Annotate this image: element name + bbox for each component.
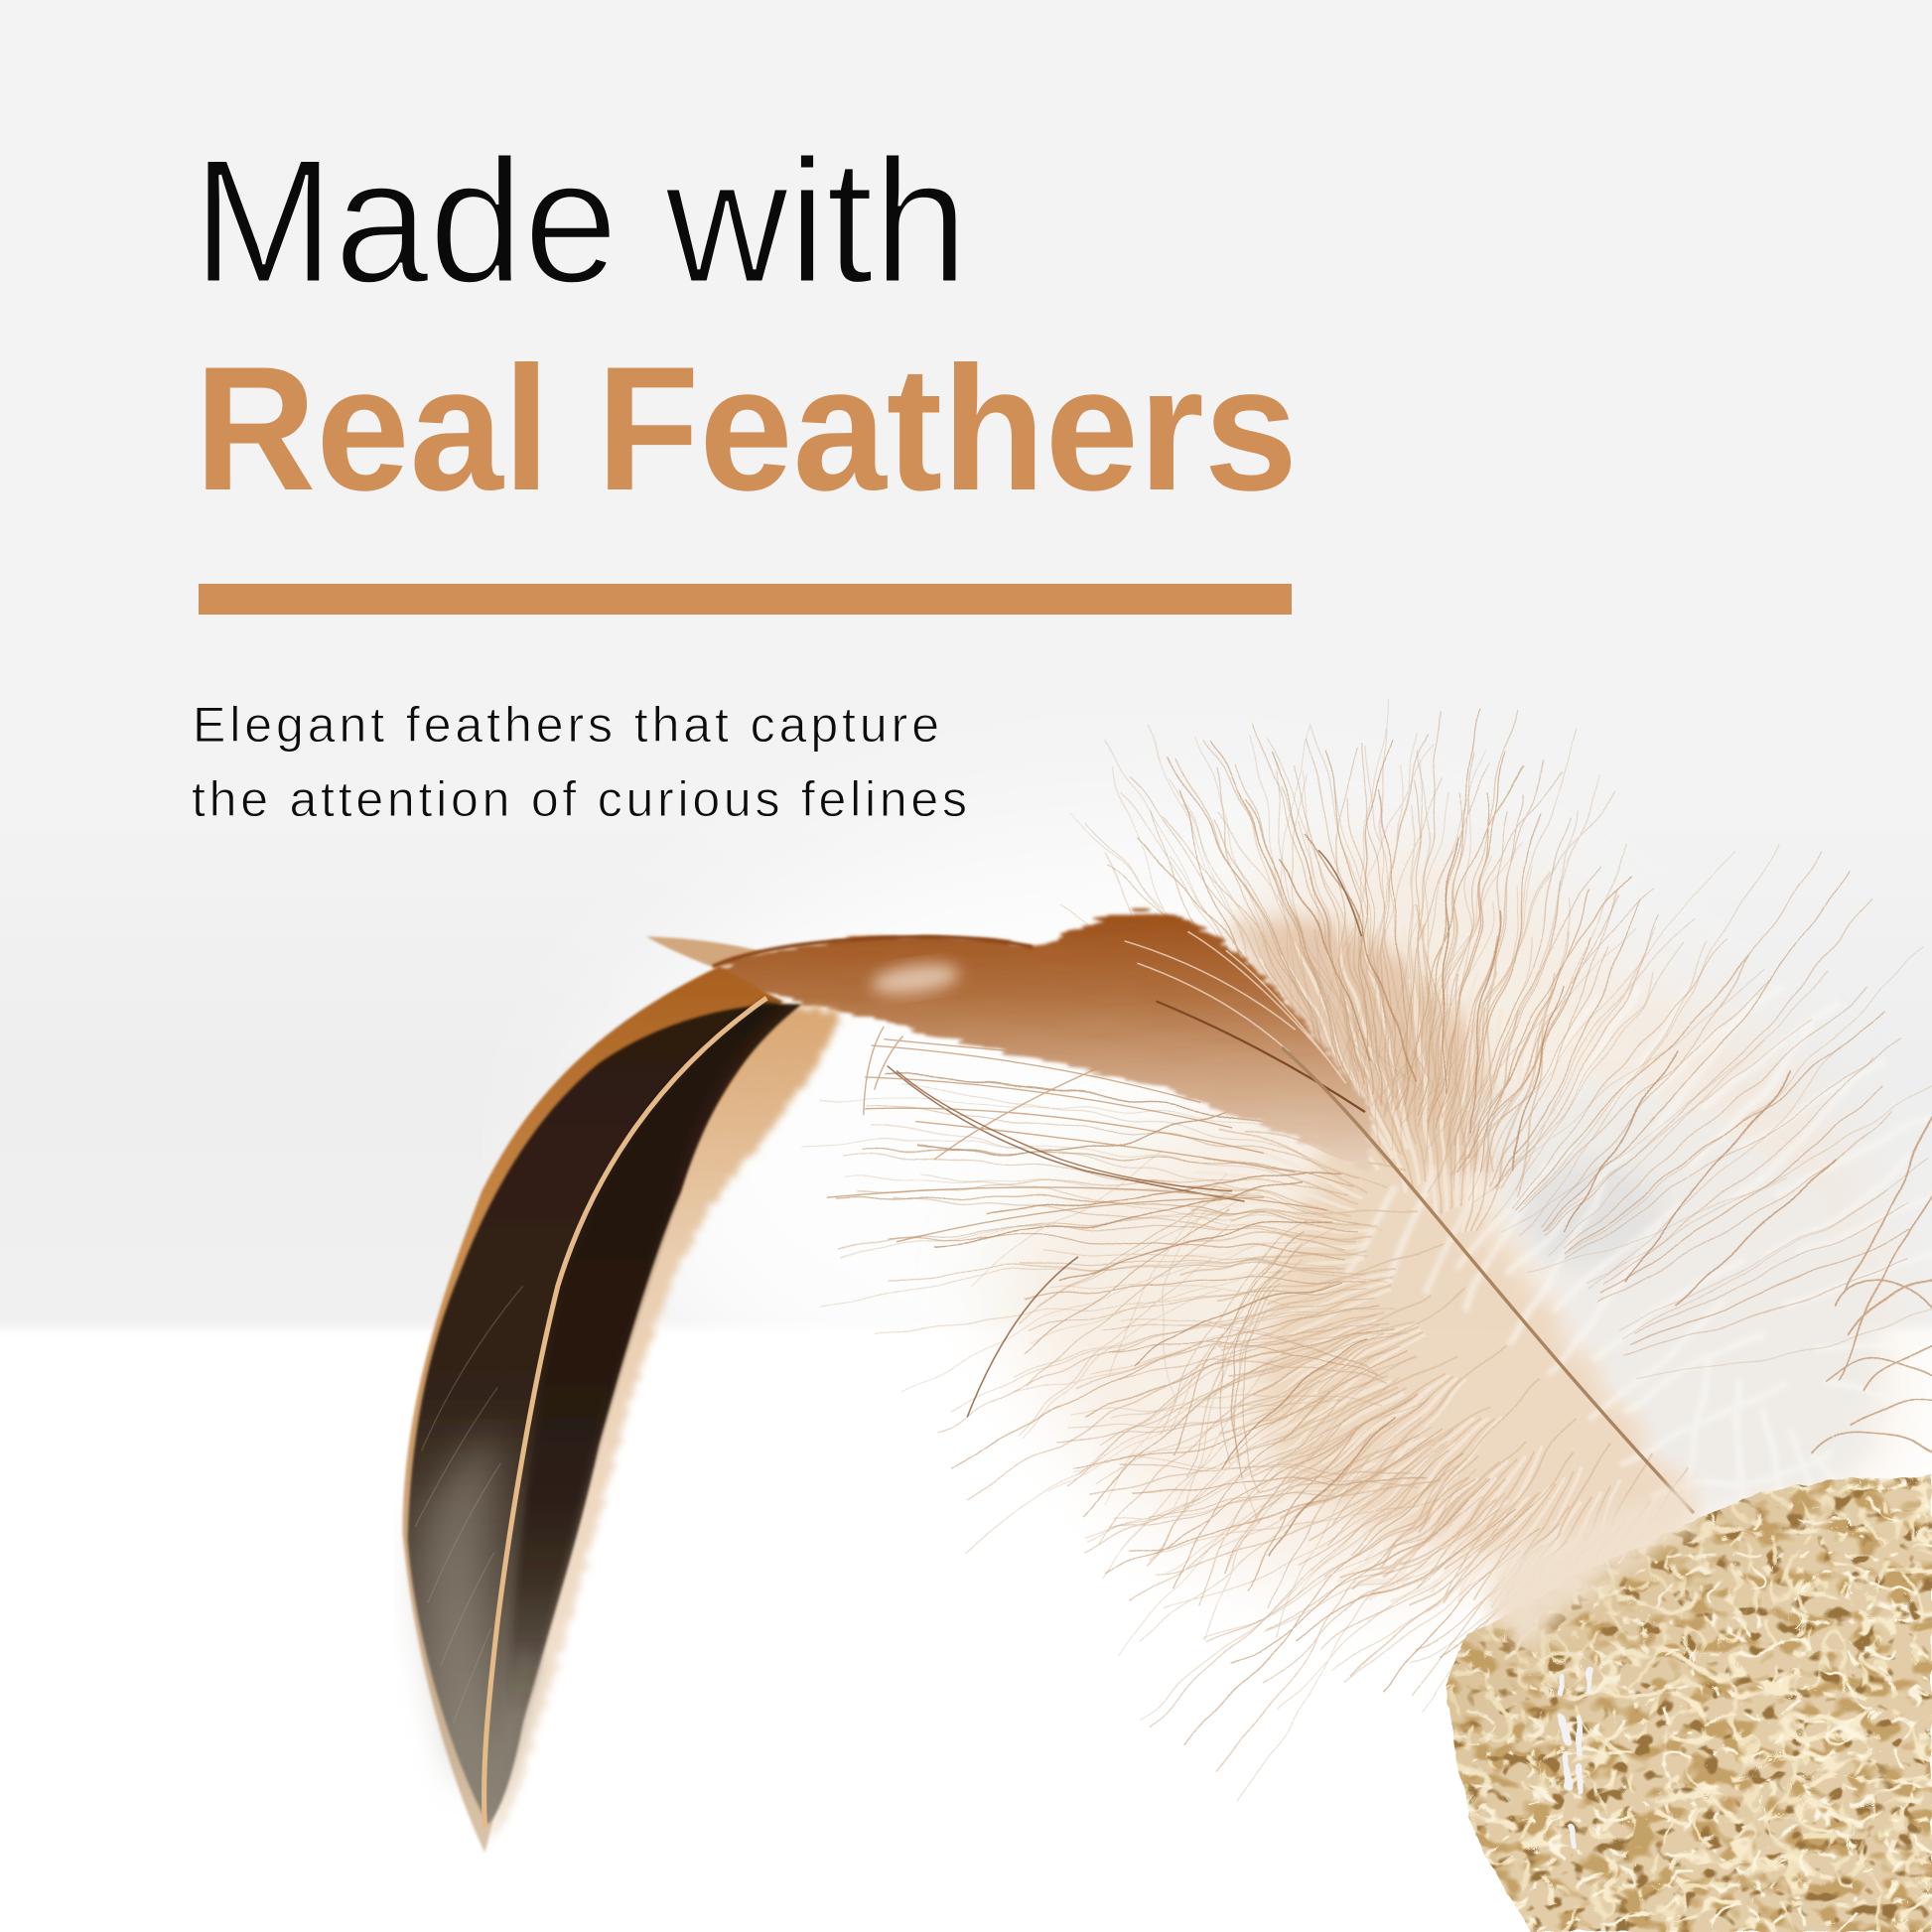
grey barbs on dark body (415, 1286, 523, 1724)
fluff: grey shadow (1516, 1162, 1663, 1266)
fur: white down strands (1333, 986, 1932, 1839)
darkest core (507, 1001, 782, 1717)
left margin (403, 966, 782, 1853)
loofah fibres c (1430, 1459, 1932, 1932)
brown upper vane (719, 911, 1370, 1173)
loofah ball (1430, 1459, 1932, 1932)
loofah fibres b (1430, 1459, 1932, 1932)
dark body (408, 1004, 801, 1825)
wisps: brown barbs (888, 838, 1836, 1553)
brown curved barb (897, 1071, 1232, 1191)
white stitching (1561, 1670, 1589, 1847)
dark shaft on vane (1156, 1001, 1365, 1112)
grey lower panel (423, 1432, 497, 1780)
fluffy feather (751, 642, 1932, 1849)
description text: Elegant feathers that capture (193, 697, 939, 753)
loofah side shading (1446, 1485, 1807, 1810)
grey lower right (494, 1641, 539, 1805)
feather base fluff over loofah (1489, 1479, 1700, 1648)
fluff: cream down (1263, 1097, 1695, 1553)
tan tip wisps (646, 936, 763, 970)
loofah fibres a (1430, 1459, 1932, 1932)
description text (192, 697, 967, 827)
fur: tan strands (1139, 895, 1693, 1623)
fluff: upper tan (1232, 914, 1528, 1182)
wisps: dark barbs (888, 850, 1361, 1417)
divider bar (199, 584, 1292, 615)
top rim (713, 937, 1033, 966)
loofah base (1430, 1459, 1932, 1932)
fur: dense strands (1147, 907, 1675, 1631)
vane barbs (827, 1027, 1327, 1242)
loofah deep holes (1430, 1459, 1932, 1932)
heading: Real Feathers: Real Feathers (195, 330, 1298, 527)
description text: the attention of curious felines (192, 771, 967, 827)
pale highlight on vane (870, 959, 961, 999)
fluff: grey down (1466, 1080, 1878, 1509)
wisps: second feather at right edge (1811, 1109, 1932, 1453)
rachis of fluffy feather (1282, 1047, 1694, 1513)
fluff: halo (986, 844, 1902, 1590)
right fringe (488, 1001, 841, 1844)
light barbs on vane (1125, 931, 1346, 1083)
wisps: pale barbs (751, 642, 1932, 1849)
cream shaft (484, 998, 766, 1828)
heading: Made with: Made with (193, 122, 968, 320)
curved brown feather (403, 911, 1370, 1853)
loofah soft holes (1430, 1459, 1932, 1932)
